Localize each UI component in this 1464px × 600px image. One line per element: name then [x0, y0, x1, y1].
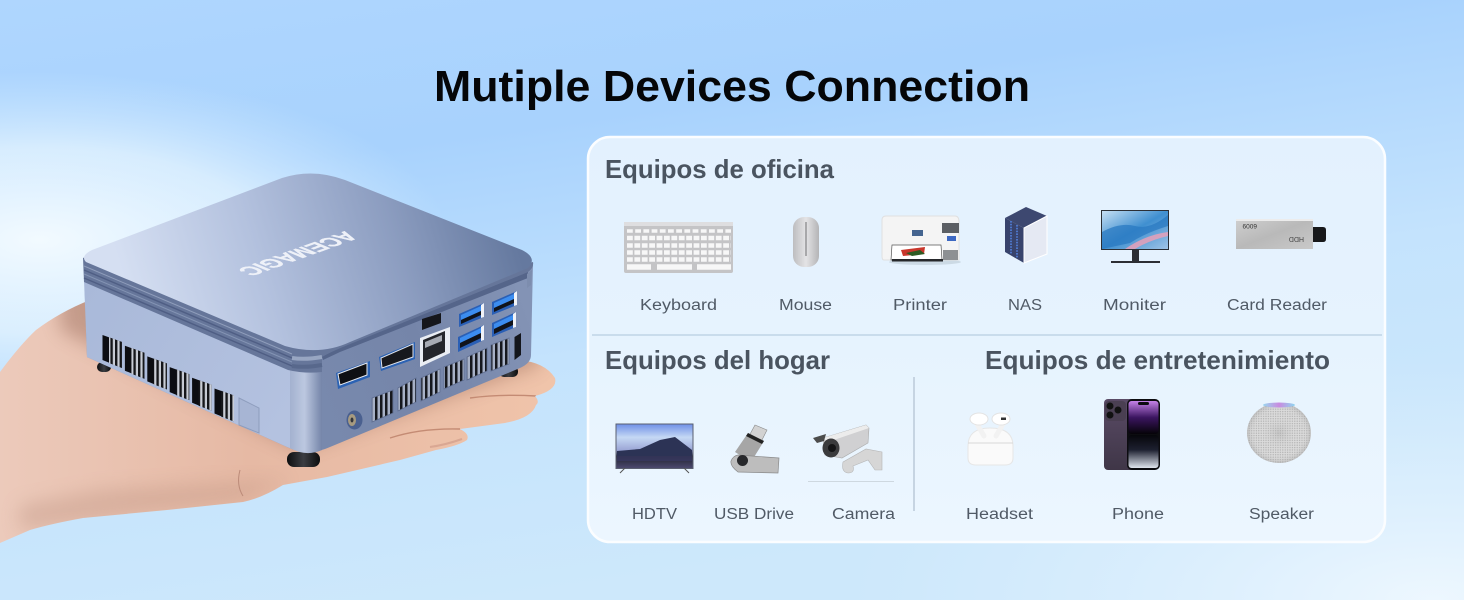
- LAN port: [420, 327, 450, 367]
- top surface: [84, 173, 532, 350]
- label: Phone: Phone: [1112, 506, 1164, 523]
- icon: security camera: [808, 425, 894, 482]
- rear vents: [372, 338, 509, 422]
- icon: card reader: HDD: [1289, 235, 1304, 242]
- label: Moniter: Moniter: [1103, 297, 1166, 314]
- icon: USB drive: [731, 425, 779, 473]
- switch: [422, 313, 441, 330]
- heading: home equipment: Equipos del hogar: [605, 345, 830, 375]
- mini PC: [83, 173, 533, 467]
- label: NAS: NAS: [1008, 297, 1042, 314]
- body silhouette: [84, 260, 533, 452]
- heading: entertainment equipment: Equipos de entretenimiento: [985, 345, 1330, 375]
- label: Camera: Camera: [832, 506, 895, 523]
- icon: smart speaker: [1247, 402, 1311, 463]
- label: HDTV: HDTV: [632, 506, 678, 523]
- icon: wireless earbuds: [968, 413, 1013, 465]
- icon: mouse: [793, 217, 819, 267]
- lid band: [83, 255, 533, 373]
- label: Mouse: Mouse: [779, 297, 832, 314]
- front corner highlight: [290, 368, 322, 453]
- icon: smartphone: [1104, 399, 1160, 470]
- panel: device categories: [588, 137, 1385, 542]
- DisplayPort: [379, 342, 415, 371]
- label: Printer: Printer: [893, 297, 947, 314]
- label: Headset: Headset: [966, 506, 1034, 523]
- icon: NAS: [1005, 207, 1047, 263]
- HDMI port: [336, 361, 370, 389]
- label: Card Reader: Card Reader: [1227, 297, 1327, 314]
- USB ports: [458, 291, 517, 352]
- icon: HDTV: [616, 424, 693, 473]
- title: Mutiple Devices Connection: [434, 62, 1030, 111]
- label: Keyboard: Keyboard: [640, 297, 717, 314]
- label: USB Drive: USB Drive: [714, 506, 794, 523]
- icon: monitor: [1101, 210, 1169, 263]
- audio jack slot: [514, 333, 521, 360]
- rubber feet: [97, 362, 518, 467]
- icon: printer: [882, 216, 961, 265]
- label: Speaker: Speaker: [1249, 506, 1314, 523]
- icon: card reader: [1236, 219, 1326, 249]
- left face: [84, 280, 292, 449]
- heading: office equipment: Equipos de oficina: [605, 154, 835, 184]
- DC jack: [346, 410, 362, 430]
- icon: card reader: 6009: [1242, 222, 1257, 229]
- logo: ACEMAGIC: [231, 229, 364, 278]
- hand holding mini PC: [0, 280, 555, 543]
- icon: keyboard: [624, 222, 733, 273]
- side vents: [102, 335, 259, 433]
